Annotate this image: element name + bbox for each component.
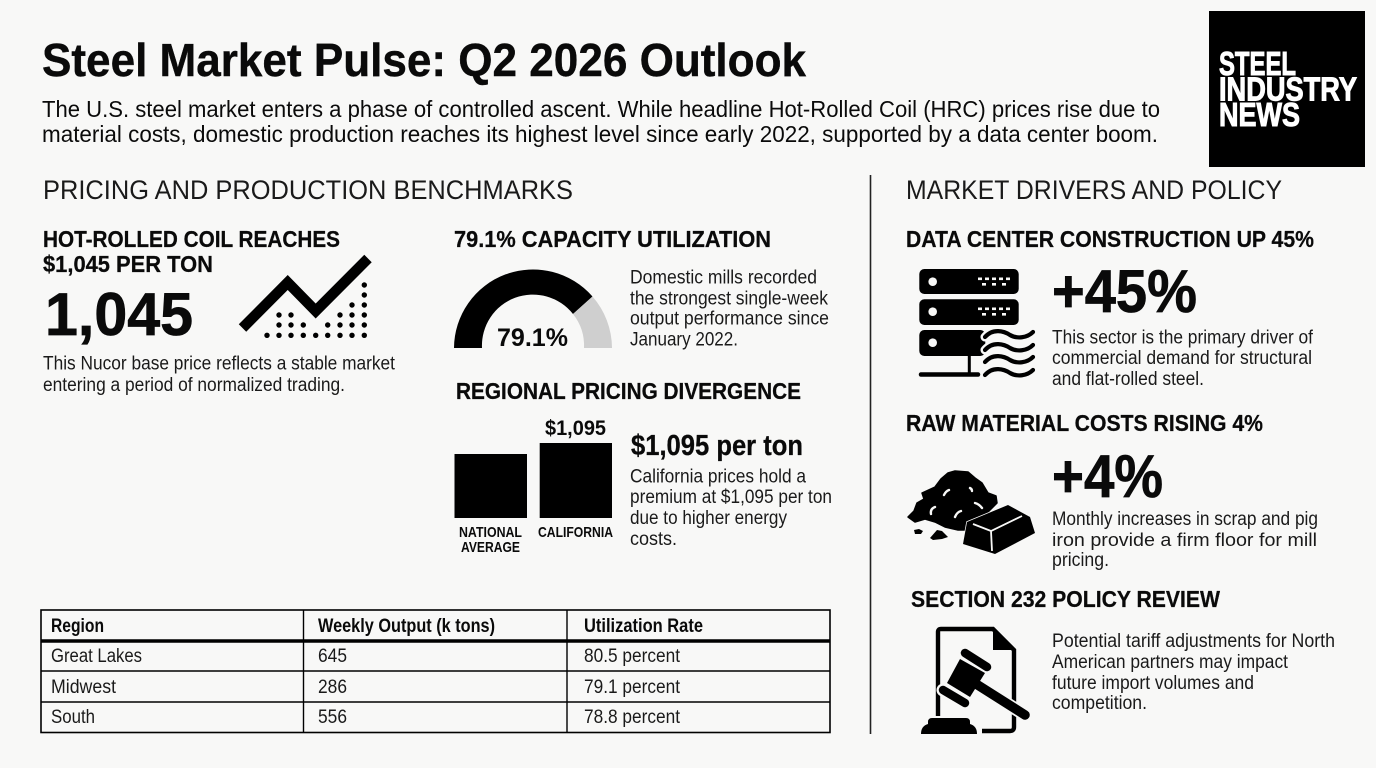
text: California premium: due to higher energy	[630, 508, 787, 529]
block: raw material costs	[906, 410, 1318, 571]
section heading: market drivers: MARKET DRIVERS AND POLICY	[906, 175, 1282, 205]
logo: Steel Industry News: NEWS	[1219, 96, 1300, 133]
text: tariff adjustments	[1052, 631, 1335, 714]
text: tariff adjustments: competition.	[1052, 693, 1147, 714]
text: tariff adjustments: future import volumes and	[1052, 673, 1254, 694]
text: domestic mills	[630, 268, 829, 350]
icon: server rack with waves	[919, 269, 1033, 375]
table: regional output: Midwest	[51, 677, 117, 698]
table: regional output: Great Lakes	[51, 646, 142, 667]
block: Section 232 policy	[911, 586, 1335, 734]
intro text: The U.S. steel market enters a phase of controlled ascent. While headline Hot-Rolled Coil (HRC) prices rise due to	[42, 96, 1160, 122]
intro text: material costs, domestic production reaches its highest level since early 2022, supported by a data center boom.	[42, 121, 1158, 147]
gauge chart: 79.1 percent	[454, 269, 612, 352]
text: domestic mills: Domestic mills recorded	[630, 268, 817, 288]
icon: gavel on document	[921, 628, 1025, 734]
text: Nucor base price: entering a period of normalized trading.	[43, 375, 345, 396]
block: data center construction	[906, 226, 1314, 390]
text: domestic mills: January 2022.	[630, 330, 738, 350]
big number: +45%: +45%	[1052, 258, 1197, 325]
text: tariff adjustments: Potential tariff adjustments for North	[1052, 631, 1335, 652]
text: domestic mills: output performance since	[630, 308, 829, 330]
bar chart: national vs California: $1,095	[545, 417, 606, 440]
heading: raw material costs: RAW MATERIAL COSTS RISING 4%	[906, 410, 1263, 436]
table: regional output: Weekly Output (k tons)	[318, 616, 495, 637]
text: primary driver: This sector is the primary driver of	[1052, 328, 1314, 348]
table: regional output: 78.8 percent	[584, 707, 681, 728]
heading: hot-rolled coil	[43, 226, 340, 277]
table: regional output	[41, 610, 830, 732]
big number: 1,045: 1,045	[45, 281, 193, 348]
bar chart: national vs California	[454, 417, 613, 556]
heading: Section 232: SECTION 232 POLICY REVIEW	[911, 586, 1220, 612]
text: scrap and pig iron: iron provide a firm floor for mill	[1052, 530, 1317, 550]
panel: market drivers and policy	[906, 175, 1335, 734]
text: scrap and pig iron	[1052, 509, 1318, 571]
text: primary driver: and flat-rolled steel.	[1052, 369, 1204, 390]
table: regional output: 645	[318, 646, 347, 667]
heading: data center: DATA CENTER CONSTRUCTION UP 45%	[906, 226, 1314, 252]
text: California premium: California prices hold a	[630, 466, 806, 488]
text: domestic mills: the strongest single-week	[630, 288, 828, 310]
title: Steel Market Pulse: Q2 2026 Outlook	[42, 34, 806, 86]
table: regional output: Region	[51, 616, 104, 637]
text: California premium	[630, 466, 832, 550]
block: regional pricing divergence	[454, 378, 832, 556]
table: regional output: 79.1 percent	[584, 677, 681, 698]
heading: capacity utilization: 79.1% CAPACITY UTILIZATION	[454, 226, 771, 252]
gauge chart: 79.1 percent: 79.1%	[497, 324, 568, 352]
logo: Steel Industry News	[1209, 11, 1365, 167]
section heading: pricing and production: PRICING AND PRODUCTION BENCHMARKS	[43, 175, 573, 205]
text: Nucor base price: This Nucor base price reflects a stable market	[43, 354, 396, 374]
panel: pricing and production benchmarks	[41, 175, 832, 732]
table: regional output: Utilization Rate	[584, 616, 703, 637]
bar chart: national vs California: CALIFORNIA	[538, 524, 613, 541]
big number: +4%: +4%	[1052, 443, 1163, 510]
table: regional output: 286	[318, 677, 347, 698]
text: tariff adjustments: American partners may impact	[1052, 652, 1289, 673]
bar chart: national vs California: AVERAGE	[461, 539, 520, 556]
text: Nucor base price	[43, 354, 396, 396]
heading: hot-rolled coil: $1,045 PER TON	[43, 251, 213, 277]
stat: $1,095 per ton: $1,095 per ton	[631, 430, 803, 462]
heading: regional pricing: REGIONAL PRICING DIVERGENCE	[456, 378, 801, 404]
text: primary driver	[1052, 328, 1314, 390]
text: California premium: premium at $1,095 per ton	[630, 487, 832, 508]
heading: hot-rolled coil: HOT-ROLLED COIL REACHES	[43, 226, 340, 252]
icon: rising line chart with dots	[242, 258, 368, 338]
block: hot-rolled coil price	[43, 226, 396, 396]
text: scrap and pig iron: pricing.	[1052, 550, 1109, 571]
block: capacity utilization	[454, 226, 829, 352]
table: regional output: 80.5 percent	[584, 646, 681, 667]
intro text	[42, 96, 1160, 147]
text: California premium: costs.	[630, 529, 677, 550]
logo: Steel Industry News: STEEL	[1219, 45, 1296, 82]
bar chart: national vs California: NATIONAL	[459, 524, 522, 541]
table: regional output: South	[51, 707, 95, 728]
icon: scrap pile and ingot	[908, 471, 1035, 554]
text: primary driver: commercial demand for structural	[1052, 348, 1312, 369]
text: scrap and pig iron: Monthly increases in scrap and pig	[1052, 509, 1318, 530]
table: regional output: 556	[318, 707, 347, 728]
